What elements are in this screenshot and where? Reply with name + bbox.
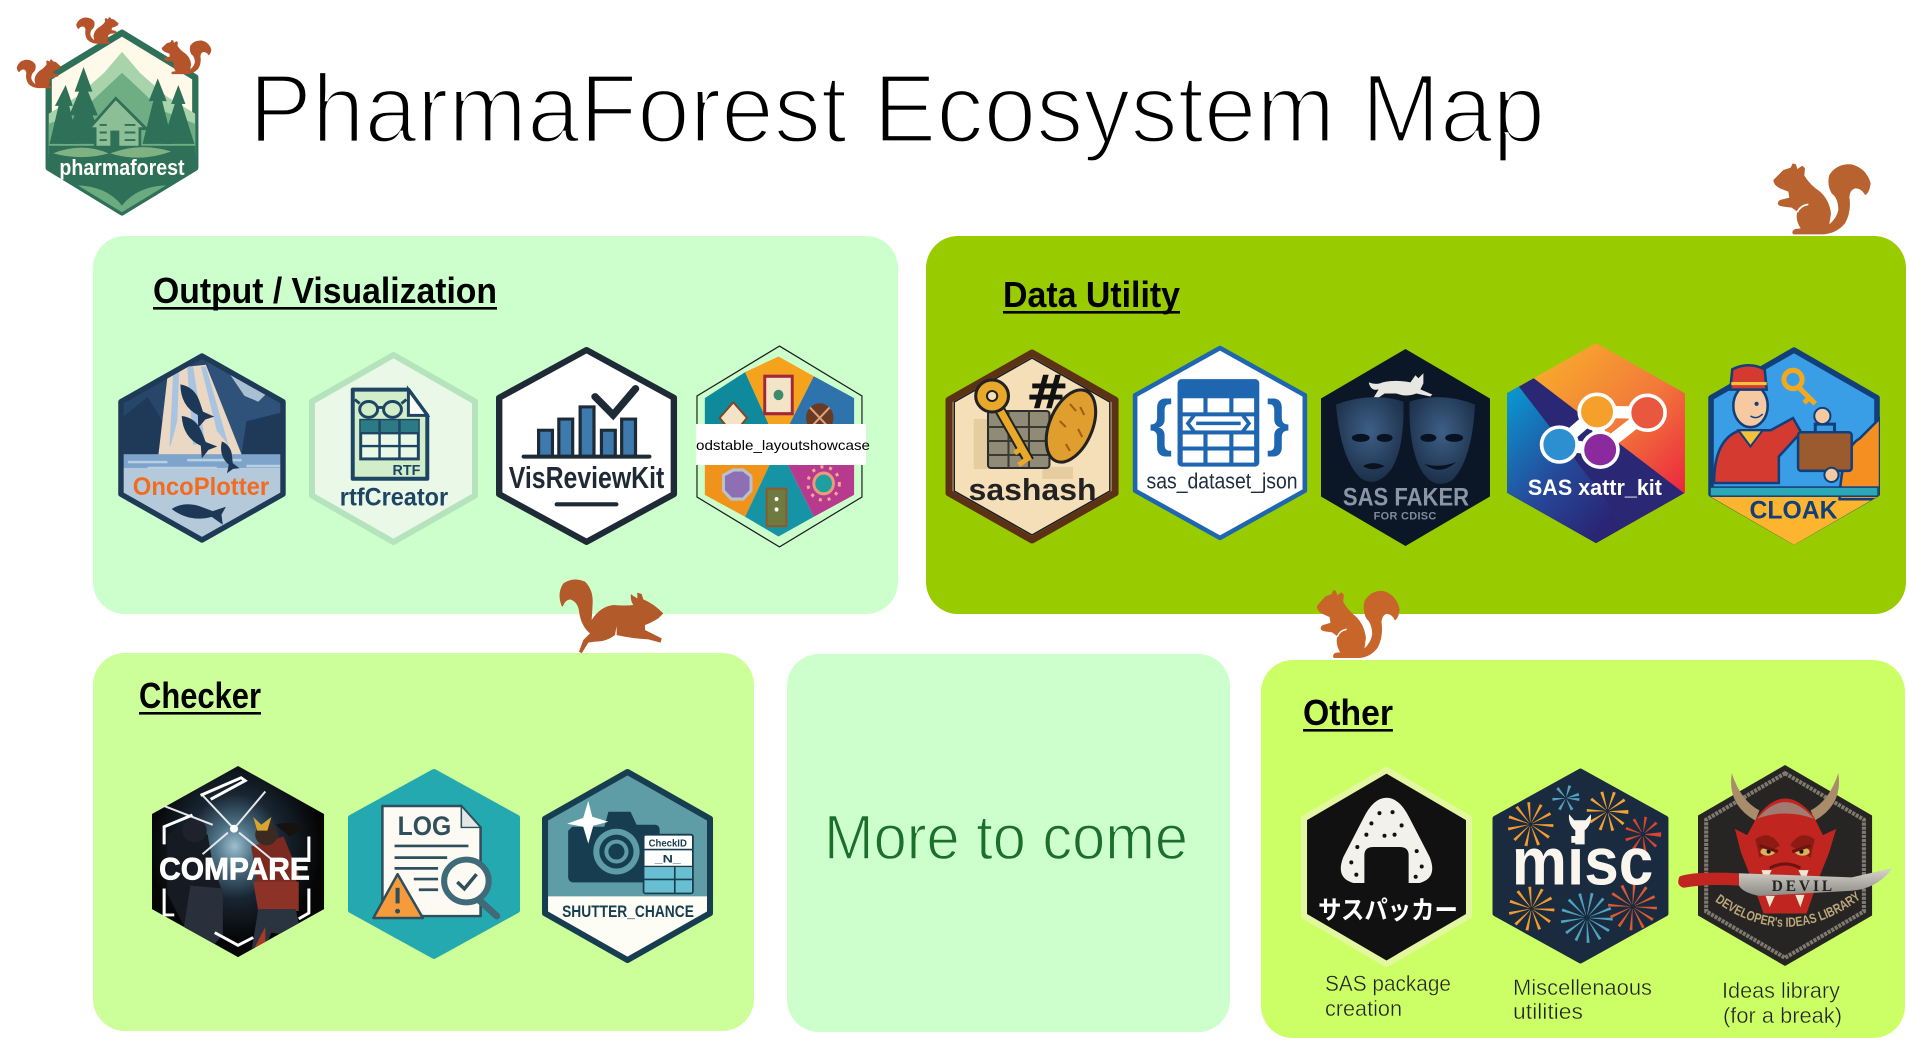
badge: CLOAK: CLOAK [1749, 497, 1838, 525]
badge: odstable_layoutshowcase: odstable_layoutshowcase [696, 437, 870, 453]
badge: DEVIL: DEVELOPER's IDEAS LIBRARY [1715, 891, 1859, 927]
badge: sashash: sashash [969, 472, 1097, 507]
badge: SHUTTER_CHANCE: SHUTTER_CHANCE [562, 902, 694, 921]
badge: LOG [351, 772, 517, 956]
panel: Data Utility [926, 236, 1906, 614]
caption: SAS package creation: creation [1325, 996, 1402, 1021]
badge: VisReviewKit [499, 350, 674, 542]
badge: DEVIL [1678, 765, 1892, 966]
badge: sashash: # [1026, 366, 1069, 419]
heading: Output / Visualization: Output / Visualization [153, 270, 497, 311]
title: PharmaForest Ecosystem Map [249, 54, 1545, 163]
caption: Miscellenaous utilities: utilities [1513, 999, 1583, 1024]
text: More to come: More to come [824, 803, 1188, 873]
heading: Data Utility: Data Utility [1003, 274, 1180, 315]
badge: SAS xattr_kit [1507, 343, 1685, 543]
icon: squirrel bottom [1317, 590, 1400, 658]
badge: SAS FAKER: FOR CDISC [1374, 511, 1436, 523]
caption: Miscellenaous utilities: Miscellenaous [1513, 975, 1652, 1000]
panel: Output / Visualization [93, 236, 898, 614]
heading: Checker: Checker [139, 675, 261, 716]
logo: pharmaforest badge: pharmaforest [59, 157, 185, 180]
icon: squirrel top right [1773, 163, 1871, 234]
badge: SHUTTER_CHANCE [542, 769, 713, 960]
badge: sas_dataset_json: } [1267, 388, 1289, 457]
caption: Ideas library (for a break): (for a break) [1723, 1003, 1842, 1028]
caption: SAS package creation: SAS package [1325, 971, 1451, 996]
badge: CLOAK [1708, 350, 1880, 547]
caption: Ideas library (for a break): Ideas library [1722, 978, 1840, 1003]
badge: odstable_layoutshowcase [696, 346, 870, 547]
badge: sas_dataset_json [1135, 348, 1305, 538]
panel: Other [1261, 660, 1905, 1038]
badge: SAS packer: サスパッカー [1318, 897, 1458, 925]
logo: pharmaforest badge [17, 17, 211, 217]
badge: OncoPlotter: OncoPlotter [133, 473, 269, 501]
panel: More to come [787, 654, 1230, 1032]
caption: SAS package creation [1325, 971, 1451, 1021]
badge: VisReviewKit: VisReviewKit [509, 461, 664, 495]
badge: SHUTTER_CHANCE: _N_ [653, 854, 682, 866]
badge: COMPARE: COMPARE [159, 851, 310, 887]
badge: SAS FAKER: SAS FAKER [1343, 483, 1469, 512]
badge: SAS FAKER [1321, 349, 1490, 546]
badge: rtfCreator: RTF [392, 463, 420, 479]
badge: SAS packer [1304, 770, 1469, 964]
heading: Other: Other [1303, 692, 1393, 733]
badge: sas_dataset_json: sas_dataset_json [1146, 469, 1298, 494]
badge: OncoPlotter [118, 353, 286, 540]
badge: rtfCreator: rtfCreator [340, 484, 448, 511]
panel: Checker [93, 653, 754, 1031]
badge: rtfCreator [312, 355, 475, 542]
badge: LOG: LOG [398, 811, 451, 841]
badge: SAS xattr_kit: SAS xattr_kit [1528, 474, 1662, 500]
badge: sas_dataset_json: { [1150, 388, 1172, 457]
badge: sashash [949, 353, 1115, 540]
badge: COMPARE [152, 766, 324, 957]
icon: squirrel running [560, 580, 663, 653]
caption: Ideas library (for a break) [1722, 978, 1842, 1028]
badge: DEVIL: DEVIL [1772, 878, 1832, 895]
badge: misc [1495, 771, 1666, 961]
caption: Miscellenaous utilities [1513, 975, 1652, 1024]
badge: SHUTTER_CHANCE: CheckID [649, 839, 687, 850]
badge: misc: misc [1512, 826, 1653, 899]
